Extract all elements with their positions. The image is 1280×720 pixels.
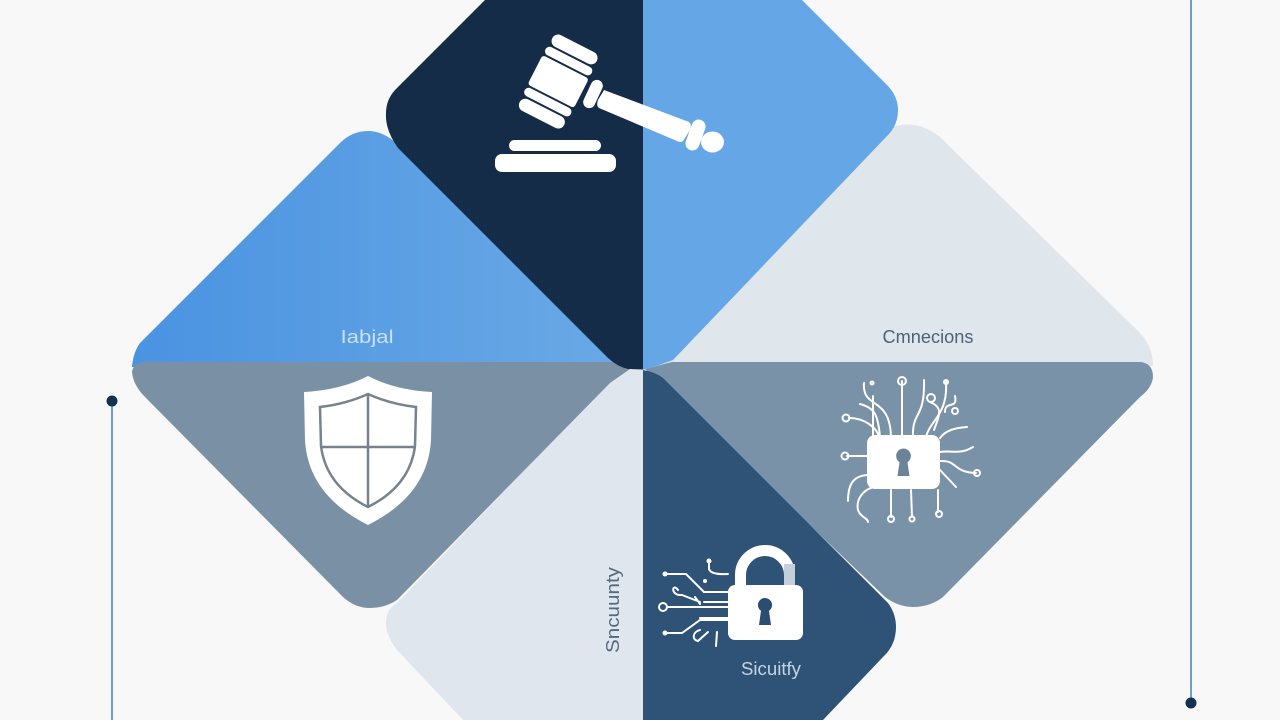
gavel base <box>509 140 601 151</box>
gavel collar and handle <box>581 78 605 110</box>
chip traces <box>847 380 976 522</box>
chip keyhole <box>896 448 911 476</box>
icon: padlock with circuit traces <box>659 551 803 646</box>
panel: top navy half diamond <box>386 0 643 370</box>
padlock traces <box>665 561 728 646</box>
label: upper left: Iabjal <box>340 327 394 347</box>
panel: top blue half diamond <box>643 0 898 370</box>
panel: lower left light triangle <box>386 369 643 720</box>
gavel head <box>516 32 601 131</box>
padlock keyhole <box>758 598 772 625</box>
padlock body <box>728 585 803 640</box>
right timeline line with dot <box>1186 0 1196 708</box>
label: upper right: Cmnecions <box>882 327 974 347</box>
panel: upper left blue triangle <box>132 131 628 367</box>
label: lower right: Sicuitfy <box>741 659 801 679</box>
icon: gavel <box>495 32 724 172</box>
panel: lower right dark blue triangle <box>643 370 896 720</box>
left timeline line with dot <box>106 396 118 720</box>
chip body <box>867 435 940 489</box>
icon: circuit lock chip <box>842 377 980 522</box>
padlock shackle <box>740 551 790 588</box>
panel: right grey triangle <box>645 362 1153 607</box>
icon: shield <box>304 376 432 525</box>
label: lower left rotated: Sncuunty <box>603 567 623 653</box>
panel: upper right light triangle <box>650 124 1153 366</box>
panel: left grey triangle <box>132 362 630 608</box>
